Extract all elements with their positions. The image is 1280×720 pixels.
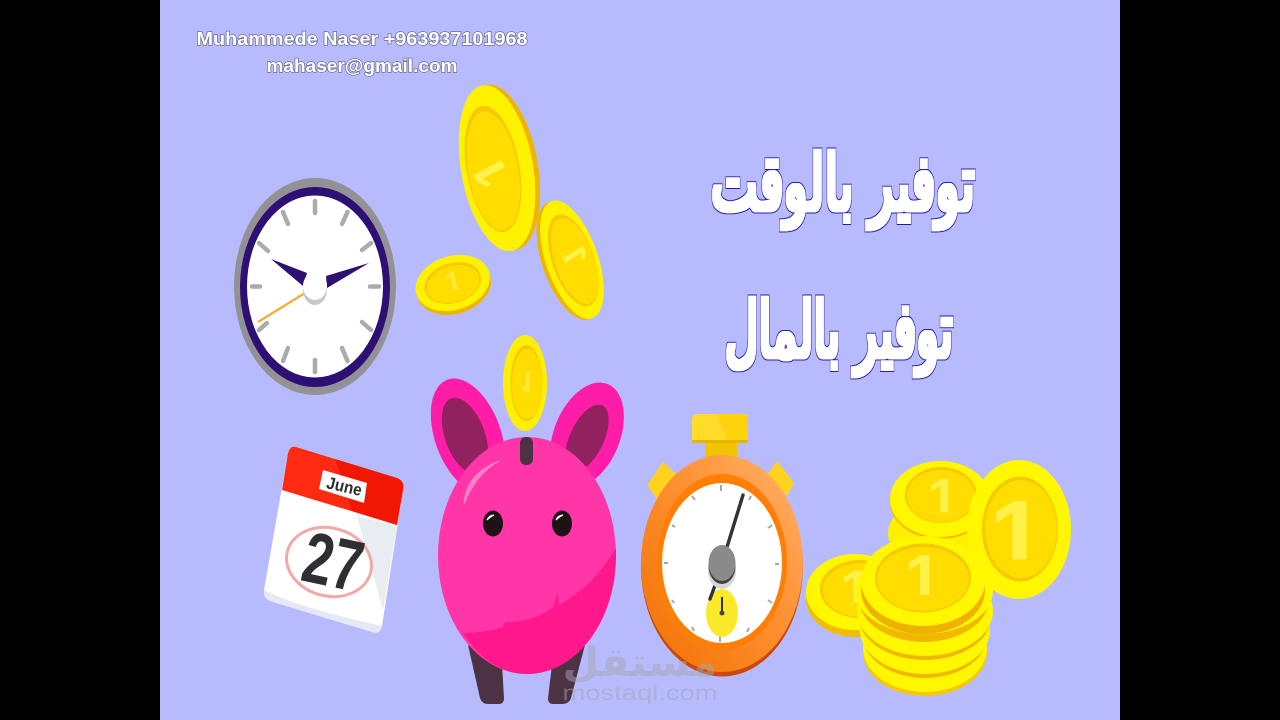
icon: stopwatch <box>641 414 803 676</box>
contact details text <box>196 29 528 76</box>
heading: saving time: توفير بالوقت <box>711 138 975 229</box>
pig highlight <box>464 461 499 504</box>
pig body <box>438 437 616 674</box>
pig coin slot <box>520 437 533 465</box>
infographic canvas <box>160 0 1120 720</box>
icon: falling coin small <box>416 254 492 315</box>
icon: coin above piggy bank: 1 <box>520 361 534 399</box>
pig belly shade <box>463 548 616 674</box>
pig inner ears <box>433 392 618 480</box>
icon: falling coin large: 1 <box>459 143 526 198</box>
icon: coin above piggy bank <box>503 335 547 431</box>
icon: falling coin small: 1 <box>442 265 466 301</box>
icon: falling coin large <box>458 84 540 252</box>
stacked coins <box>863 608 987 696</box>
icon: coin pile: 1 <box>840 558 872 621</box>
icon: wall clock <box>234 178 396 395</box>
icon: coin pile: 1 <box>927 467 959 531</box>
icon: coin pile: 1 <box>989 480 1045 592</box>
icon: falling coin medium: 1 <box>549 236 596 277</box>
contact details text: Muhammede Naser +963937101968 <box>196 29 528 49</box>
icon: calendar <box>264 447 403 633</box>
watermark: مستقل <box>562 640 718 686</box>
icon: calendar: 27 <box>296 518 370 608</box>
pig eyes <box>483 510 503 536</box>
pig legs <box>468 645 585 704</box>
contact details text: mahaser@gmail.com <box>266 56 458 76</box>
icon: falling coin medium <box>536 200 604 320</box>
watermark: mostaql.com <box>562 682 718 705</box>
left coin <box>806 559 904 637</box>
watermark <box>562 640 718 705</box>
back coins <box>888 500 982 566</box>
heading: saving money: توفير بالمال <box>725 285 953 376</box>
icon: piggy bank <box>416 368 638 704</box>
icon: calendar: June <box>325 474 364 500</box>
icon: coin pile: 1 <box>904 541 942 617</box>
standing coin <box>967 460 1071 599</box>
pig ears <box>416 368 638 504</box>
icon: coin pile <box>806 460 1071 696</box>
